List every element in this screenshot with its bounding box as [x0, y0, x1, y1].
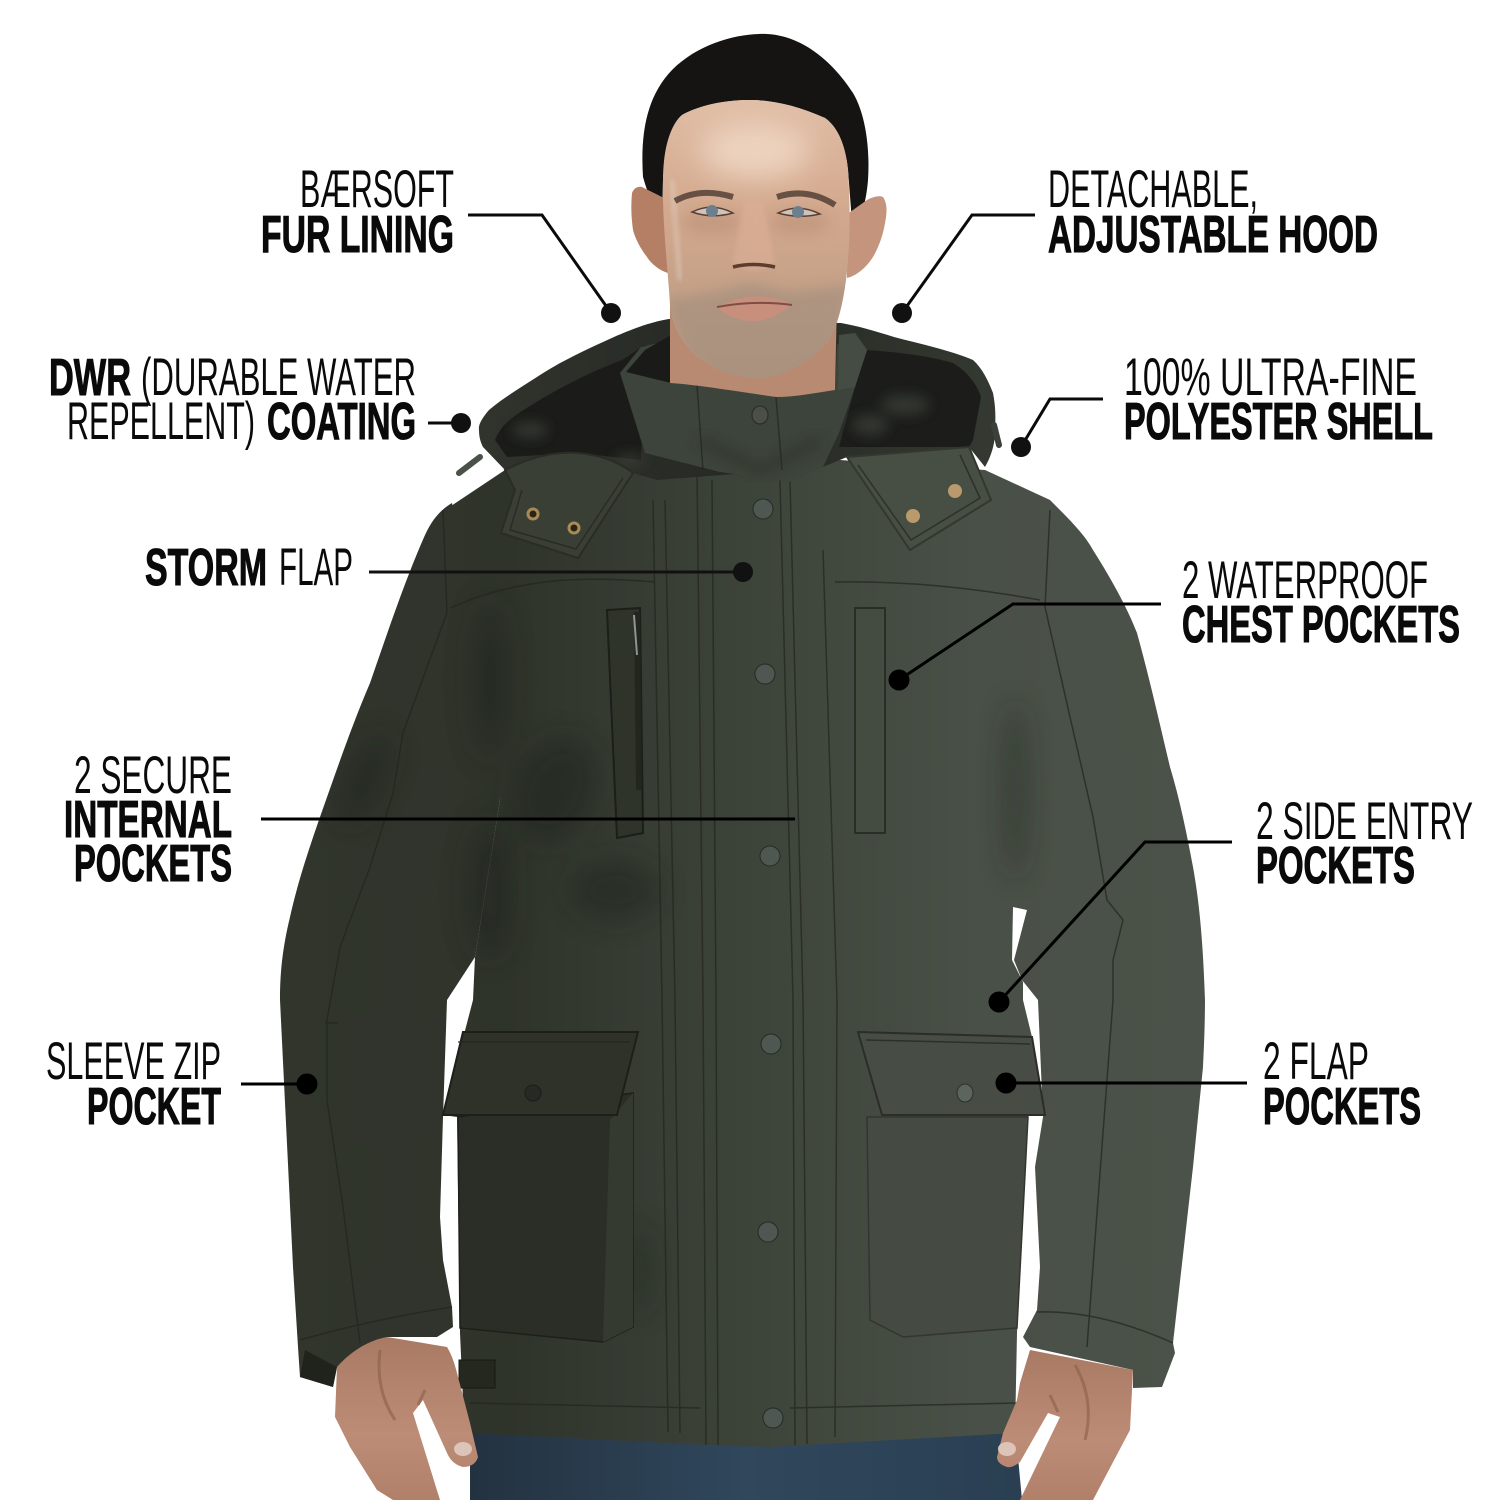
callout line and dot: storm flap: [369, 562, 753, 582]
label: secure internal pockets: INTERNAL: [64, 791, 232, 849]
facial shading and stubble: [665, 122, 850, 385]
label: sleeve zip pocket: POCKET: [87, 1078, 221, 1136]
label: sleeve zip pocket: [46, 1032, 221, 1136]
label: side entry pockets: POCKETS: [1256, 837, 1415, 895]
callout line and dot: flap pockets: [996, 1072, 1247, 1094]
nose: [733, 200, 775, 270]
right sleeve: [1000, 500, 1205, 1388]
jacket body: [443, 460, 1060, 1447]
right ear: [846, 196, 887, 278]
label: baersoft fur lining: BÆRSOFT: [300, 160, 454, 219]
cargo pocket: right: [858, 1032, 1045, 1337]
label: DWR coating: REPELLENT): [67, 392, 255, 451]
label: storm flap: FLAP: [279, 538, 353, 597]
eyes: [692, 207, 733, 216]
fur highlights: [512, 395, 929, 466]
grommets: [528, 509, 538, 519]
callout line: internal pockets: [261, 818, 795, 820]
label: secure internal pockets: 2 SECURE: [74, 746, 232, 805]
jeans: [470, 1425, 1022, 1500]
callout line and dot: chest pockets: [888, 604, 1161, 690]
label: baersoft fur lining: [261, 160, 454, 264]
left ear: [631, 187, 668, 273]
callout line and dot: sleeve zip pocket: [241, 1074, 318, 1094]
label: flap pockets: [1263, 1032, 1421, 1136]
hair: [642, 34, 868, 235]
label: DWR coating: DWR: [49, 349, 131, 407]
label: DWR coating: (DURABLE WATER: [141, 348, 416, 407]
label: side entry pockets: [1256, 792, 1473, 895]
callout line and dot: DWR coating: [428, 413, 471, 433]
head: [631, 34, 887, 397]
label: DWR coating: [49, 348, 416, 451]
label: detachable adjustable hood: [1048, 160, 1378, 264]
cuff undersides: [300, 1350, 337, 1387]
callout line and dot: fur lining: [468, 215, 621, 323]
label: detachable adjustable hood: DETACHABLE,: [1048, 160, 1258, 219]
chest pockets: [607, 608, 885, 838]
label: secure internal pockets: POCKETS: [74, 835, 232, 893]
label: DWR coating: COATING: [267, 393, 416, 451]
cargo pocket: left: [443, 1032, 638, 1388]
callout line and dot: polyester shell: [1011, 399, 1103, 457]
label: storm flap: STORM: [145, 539, 267, 597]
label: sleeve zip pocket: SLEEVE ZIP: [46, 1032, 221, 1091]
eyebrows: [675, 193, 733, 201]
left hand: [335, 1337, 478, 1500]
label: flap pockets: 2 FLAP: [1263, 1032, 1369, 1091]
face: [663, 100, 850, 378]
callout line and dot: side entry pockets: [988, 842, 1232, 1012]
fur lining right: [839, 350, 981, 447]
left sleeve: [280, 503, 500, 1387]
hood shell: [479, 319, 995, 480]
fabric shadows: [354, 645, 1030, 953]
hood drawcords: [459, 457, 480, 473]
hood flap left: [501, 453, 633, 558]
label: baersoft fur lining: FUR LINING: [261, 206, 454, 264]
label: waterproof chest pockets: [1182, 551, 1460, 654]
stand collar: [620, 333, 867, 482]
collar snap: [752, 406, 768, 424]
label: secure internal pockets: [64, 746, 232, 893]
hood flap right: [847, 447, 991, 550]
label: polyester shell: [1124, 348, 1433, 451]
neck: [670, 300, 837, 397]
placket snap buttons: [753, 499, 783, 1428]
fur lining left: [495, 345, 645, 460]
brass snaps: [906, 509, 920, 523]
jacket seams: [300, 470, 1173, 1445]
lips: [717, 296, 792, 321]
photo: man wearing parka: [280, 34, 1205, 1500]
right hand: [997, 1350, 1133, 1500]
callout line and dot: hood: [892, 215, 1035, 323]
